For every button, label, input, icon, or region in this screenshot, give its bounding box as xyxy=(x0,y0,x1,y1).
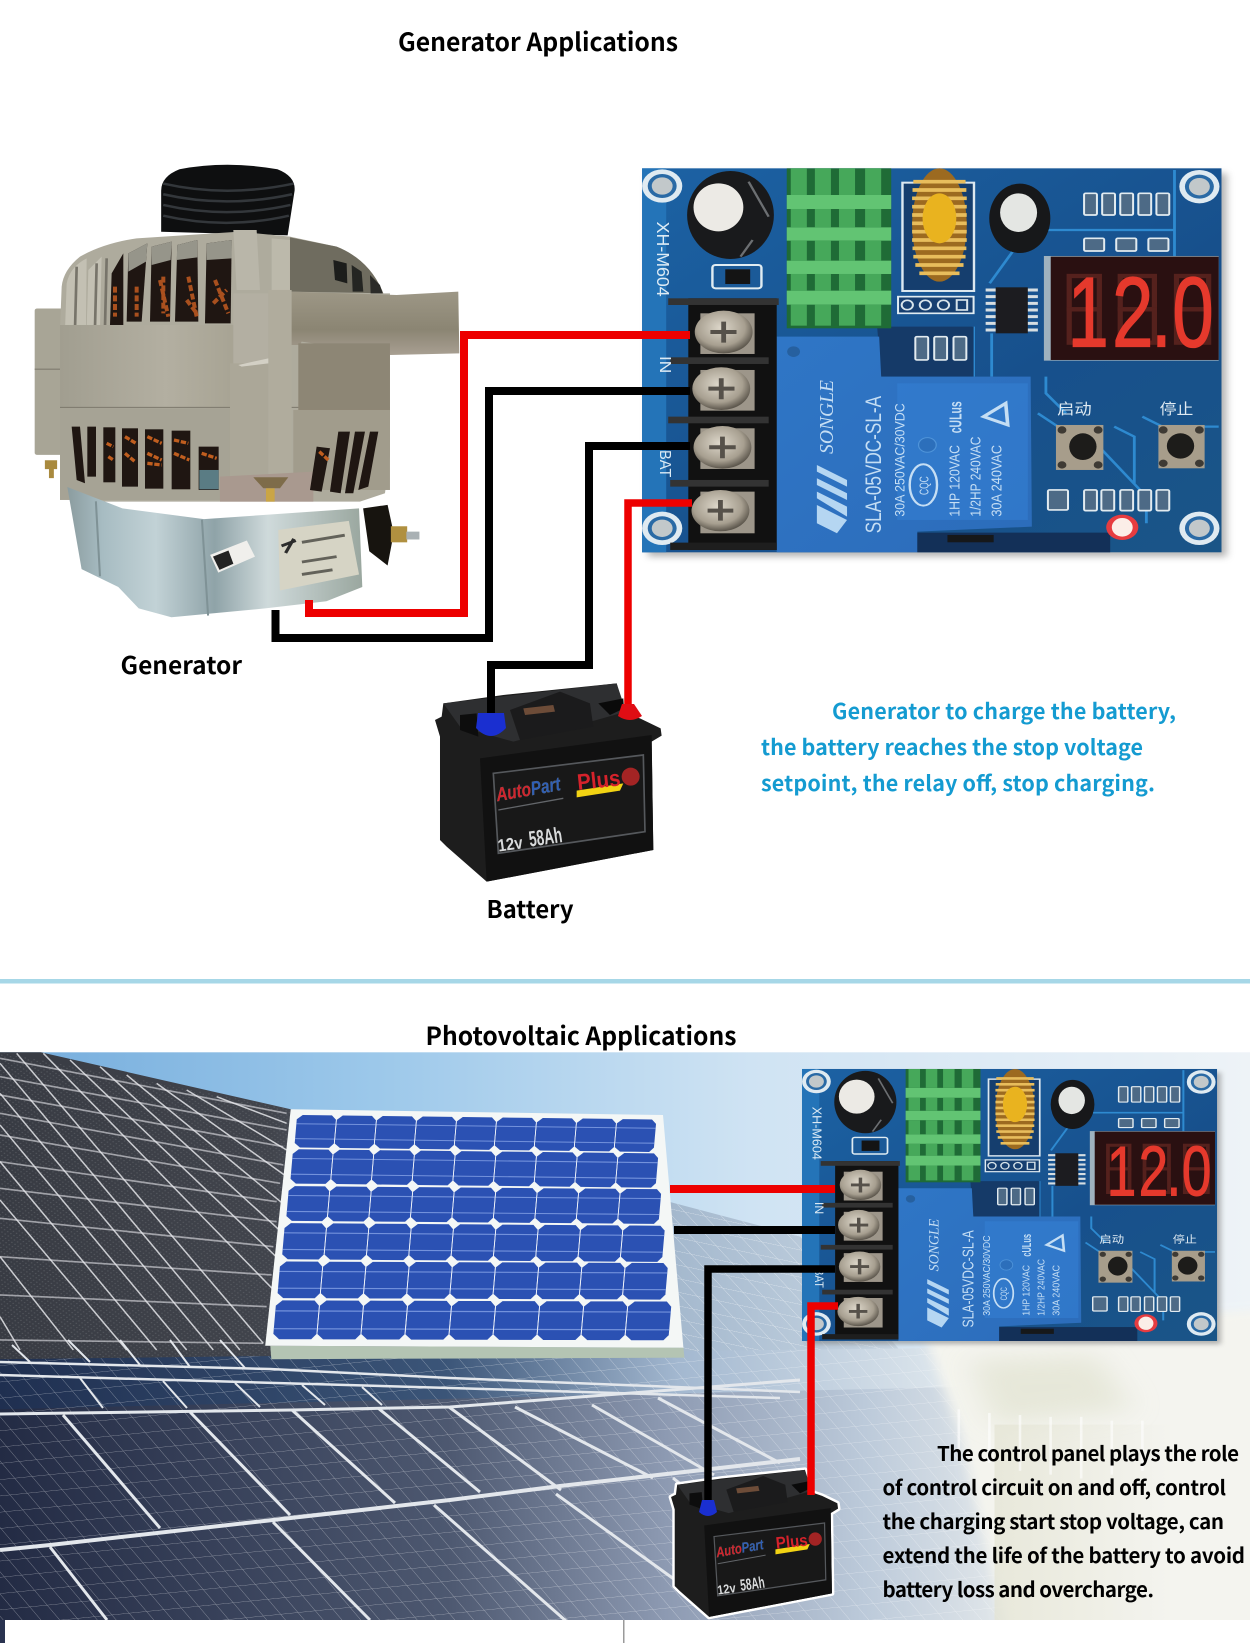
panel: control board, generator section: SLA-05VDC-SL-A xyxy=(862,396,887,533)
text block: generator explanation: Generator to charge the battery, xyxy=(832,695,1176,726)
panel: control board, generator section xyxy=(642,168,1227,557)
icon: battery, generator section: AutoPart xyxy=(494,774,563,806)
panel: control board, photovoltaic section: 启动 xyxy=(1099,1232,1124,1247)
bottom white strip xyxy=(0,1620,1250,1643)
panel: control board, photovoltaic section xyxy=(802,1069,1221,1344)
icon: battery, generator section: Plus xyxy=(576,765,622,795)
panel: control board, generator section: 停止 xyxy=(1160,397,1193,418)
title: photovoltaic applications: Photovoltaic Applications xyxy=(426,1017,736,1053)
panel: control board, generator section: 30A 250VAC/30VDC xyxy=(893,403,908,517)
icon: battery, photovoltaic section: 58Ah xyxy=(739,1574,766,1595)
icon: battery negative terminal xyxy=(476,713,506,736)
panel: control board, photovoltaic section: BAT xyxy=(812,1268,825,1288)
text block: photovoltaic explanation: The control panel plays the role xyxy=(937,1437,1239,1467)
label: battery: Battery xyxy=(486,890,574,925)
text block: photovoltaic explanation: extend the life of the battery to avoid xyxy=(882,1539,1245,1569)
upper solar array grid lines xyxy=(0,1053,287,1350)
icon: battery positive terminal xyxy=(618,704,642,720)
icon: battery, generator section xyxy=(435,683,662,882)
icon: battery, photovoltaic section: Plus xyxy=(775,1531,809,1553)
panel: control board, generator section: cULus xyxy=(946,401,966,433)
panel: control board, generator section: CQC xyxy=(917,476,932,495)
wire: battery negative to board, photovoltaic section xyxy=(708,1269,835,1507)
icon: battery, photovoltaic section: AutoPart xyxy=(714,1537,766,1561)
panel: control board, generator section: 1/2HP 240VAC xyxy=(967,436,984,517)
panel: control board, photovoltaic section: 停止 xyxy=(1173,1232,1197,1247)
panel: control board, photovoltaic section: CQC xyxy=(998,1287,1009,1300)
text block: photovoltaic explanation xyxy=(882,1437,1245,1603)
panel: control board, photovoltaic section: 30A 240VAC xyxy=(1051,1265,1063,1316)
text block: generator explanation xyxy=(761,695,1176,798)
wire: battery positive to board, photovoltaic section xyxy=(811,1306,838,1495)
icon: generator xyxy=(35,165,459,617)
text block: generator explanation: the battery reaches the stop voltage xyxy=(761,731,1143,762)
wire: solar positive to board xyxy=(670,1185,835,1193)
wire: generator positive to board xyxy=(309,335,690,613)
text block: generator explanation: setpoint, the relay off, stop charging. xyxy=(761,767,1155,798)
panel: control board, photovoltaic section: IN xyxy=(812,1202,825,1214)
icon: battery negative terminal, photovoltaic section xyxy=(699,1500,717,1516)
section divider xyxy=(0,979,1250,984)
icon: battery, generator section: 12v xyxy=(496,832,524,856)
panel: control board, photovoltaic section: 30A 250VAC/30VDC xyxy=(981,1235,992,1316)
lower array frame rails xyxy=(0,1340,800,1621)
icon: battery, photovoltaic section xyxy=(671,1470,838,1617)
icon: battery, photovoltaic section: 12v xyxy=(716,1580,737,1598)
panel: control board, photovoltaic section: SLA-05VDC-SL-A xyxy=(960,1230,978,1328)
panel: control board, generator section: BAT xyxy=(656,450,673,477)
panel: control board, generator section: IN xyxy=(656,356,673,373)
wire: generator negative to board xyxy=(276,391,690,638)
panel: control board, photovoltaic section: 1/2HP 240VAC xyxy=(1036,1259,1048,1316)
panel: control board, generator section: SONGLE xyxy=(816,380,837,454)
wire: solar negative to board xyxy=(674,1226,835,1234)
panel: control board, photovoltaic section: SONGLE xyxy=(926,1219,942,1271)
panel: blue solar module xyxy=(265,1109,684,1359)
title: generator applications: Generator Applications xyxy=(398,23,678,59)
text block: photovoltaic explanation: of control circuit on and off, control xyxy=(882,1471,1226,1501)
panel: control board, photovoltaic section: XH-M604 xyxy=(809,1107,823,1160)
label: generator: Generator xyxy=(120,646,243,681)
wire: battery negative to board xyxy=(491,446,690,722)
panel: solar farm photo background xyxy=(0,1052,1250,1640)
panel: control board, generator section: 1HP 120VAC xyxy=(946,445,963,517)
panel: control board, generator section: 12.0 xyxy=(1067,257,1214,368)
panel: control board, generator section: 30A 240VAC xyxy=(989,445,1005,517)
panel: control board, photovoltaic section: cULus xyxy=(1021,1234,1034,1257)
panel: control board, generator section: XH-M604 xyxy=(653,222,672,297)
panel: control board, photovoltaic section: 12.0 xyxy=(1107,1133,1211,1211)
panel: control board, photovoltaic section: 1HP 120VAC xyxy=(1021,1265,1033,1316)
icon: battery, generator section: 58Ah xyxy=(527,822,564,852)
panel: control board, generator section: 启动 xyxy=(1057,397,1092,418)
text block: photovoltaic explanation: battery loss and overcharge. xyxy=(882,1573,1154,1603)
wire: battery positive to board xyxy=(628,503,692,716)
text block: photovoltaic explanation: the charging start stop voltage, can xyxy=(882,1505,1224,1535)
